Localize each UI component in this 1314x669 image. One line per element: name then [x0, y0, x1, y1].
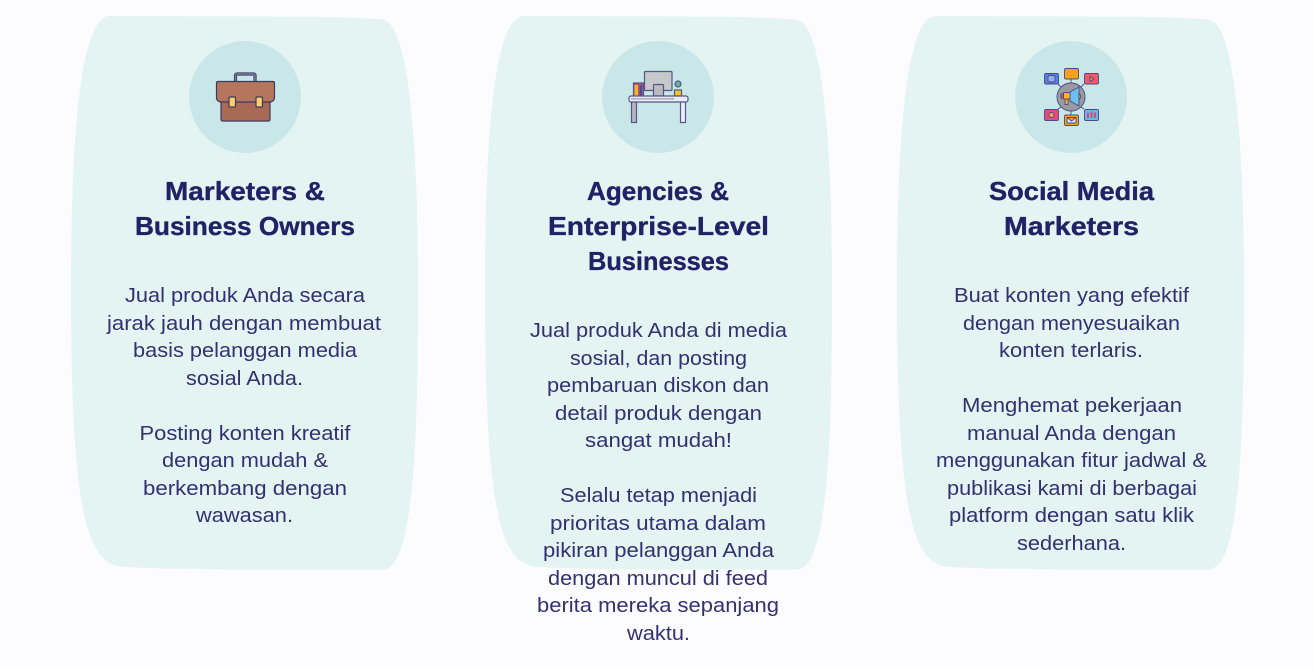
panel: agencies and enterprise — [485, 16, 832, 645]
body text 2: waktu. — [626, 623, 690, 645]
card background 1 — [71, 16, 418, 570]
body text 1: sosial Anda. — [186, 368, 303, 390]
body text 1: dengan mudah & — [162, 450, 329, 472]
body text 2: sangat mudah! — [585, 430, 732, 452]
body text 2: pikiran pelanggan Anda — [543, 540, 775, 562]
body text 3: konten terlaris. — [999, 340, 1143, 362]
heading 2: Enterprise-Level — [548, 211, 769, 241]
panel: marketers and business owners — [71, 16, 418, 570]
heading 1: Marketers & — [165, 176, 325, 206]
panel: social media marketers — [897, 16, 1244, 570]
body text 2: detail produk dengan — [555, 403, 762, 425]
body text 2: sosial, dan posting — [570, 348, 747, 370]
heading 3 — [989, 176, 1155, 241]
body text 3: dengan menyesuaikan — [963, 313, 1180, 335]
icon: megaphone with social networks — [1044, 68, 1098, 126]
body text 2: berita mereka sepanjang — [537, 595, 779, 617]
body text 2: Selalu tetap menjadi — [560, 485, 757, 507]
body text 1: berkembang dengan — [143, 478, 347, 500]
card background 3 — [897, 16, 1244, 570]
heading 1: Business Owners — [135, 211, 355, 241]
body text 3: manual Anda dengan — [967, 423, 1176, 445]
body text 3: platform dengan satu klik — [949, 505, 1195, 527]
body text 1: Jual produk Anda secara — [125, 285, 366, 307]
body text 1: Posting konten kreatif — [140, 423, 351, 445]
body text 2 — [530, 320, 788, 645]
body text 1: wawasan. — [195, 505, 293, 527]
icon circle 3 — [1015, 41, 1127, 153]
heading 2: Agencies & — [587, 176, 729, 206]
body text 3: sederhana. — [1017, 533, 1126, 555]
body text 2: prioritas utama dalam — [550, 513, 766, 535]
icon: briefcase — [216, 74, 274, 121]
icon circle 1 — [189, 41, 301, 153]
body text 3: publikasi kami di berbagai — [947, 478, 1197, 500]
icon circle 2 — [602, 41, 714, 153]
heading 1 — [135, 176, 355, 241]
body text 2: Jual produk Anda di media — [530, 320, 788, 342]
icon: office desk — [629, 72, 688, 122]
body text 3: Buat konten yang efektif — [954, 285, 1189, 307]
heading 3: Marketers — [1004, 211, 1139, 241]
body text 3 — [936, 285, 1208, 555]
body text 1 — [106, 285, 381, 527]
body text 3: Menghemat pekerjaan — [962, 395, 1182, 417]
heading 2 — [548, 176, 769, 276]
body text 1: jarak jauh dengan membuat — [106, 313, 381, 335]
body text 3: menggunakan fitur jadwal & — [936, 450, 1208, 472]
card background 2 — [485, 16, 832, 570]
body text 2: dengan muncul di feed — [548, 568, 768, 590]
body text 1: basis pelanggan media — [133, 340, 358, 362]
body text 2: pembaruan diskon dan — [547, 375, 769, 397]
heading 2: Businesses — [588, 246, 729, 276]
heading 3: Social Media — [989, 176, 1155, 206]
